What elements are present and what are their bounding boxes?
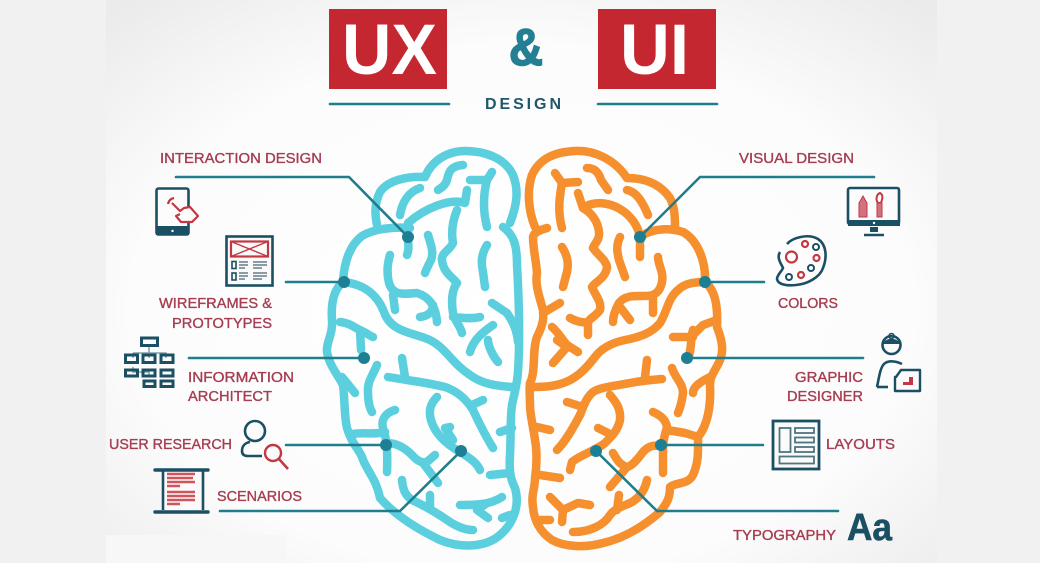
label: colors: COLORS (778, 296, 838, 312)
label: information architect: ARCHITECT (188, 389, 272, 405)
title: UX box: UX (342, 11, 437, 90)
connector: typography (590, 445, 838, 511)
label: layouts: LAYOUTS (826, 437, 895, 453)
icon: scroll document (155, 469, 208, 512)
connector: scenarios (220, 445, 467, 511)
label: visual design: VISUAL DESIGN (739, 151, 854, 167)
icon: page layout (773, 421, 819, 469)
subtitle: design: DESIGN (485, 96, 561, 113)
icon: graphic designer (877, 334, 920, 391)
label: scenarios: SCENARIOS (217, 489, 302, 505)
label: graphic designer: DESIGNER (787, 389, 863, 405)
label: information architect: INFORMATION (188, 370, 294, 386)
label: wireframes and prototypes: PROTOTYPES (172, 316, 272, 332)
label: information architect (188, 370, 294, 405)
icon: user with magnifier (242, 421, 288, 469)
connector: graphic designer (681, 352, 863, 364)
connector: information architect (189, 352, 370, 364)
icon: monitor with pencil and brush (848, 188, 900, 235)
connector: colors (699, 276, 764, 288)
brain: left hemisphere (UX) (327, 151, 519, 545)
icon: typography Aa: Aa (847, 507, 893, 549)
connector: layouts (655, 439, 763, 451)
label: typography: TYPOGRAPHY (733, 528, 836, 544)
connector: user research (286, 439, 392, 451)
label: wireframes and prototypes (159, 296, 272, 332)
title: ampersand: & (509, 19, 543, 77)
label: graphic designer: GRAPHIC (795, 370, 863, 386)
connector: wireframes (286, 276, 350, 288)
title: UI box (598, 9, 716, 90)
connector: interaction design (176, 177, 414, 243)
connector: visual design (634, 177, 874, 243)
label: user research: USER RESEARCH (109, 437, 232, 453)
label: wireframes and prototypes: WIREFRAMES & (159, 296, 272, 312)
title: UI box: UI (620, 11, 689, 90)
label: interaction design: INTERACTION DESIGN (160, 151, 322, 167)
icon: wireframe page (226, 236, 272, 286)
icon: hierarchy chart (126, 338, 173, 386)
icon: paint palette (777, 236, 826, 285)
label: graphic designer (787, 370, 863, 405)
brain: right hemisphere (UI) (529, 151, 722, 546)
icon: tablet with tapping hand (156, 188, 198, 235)
